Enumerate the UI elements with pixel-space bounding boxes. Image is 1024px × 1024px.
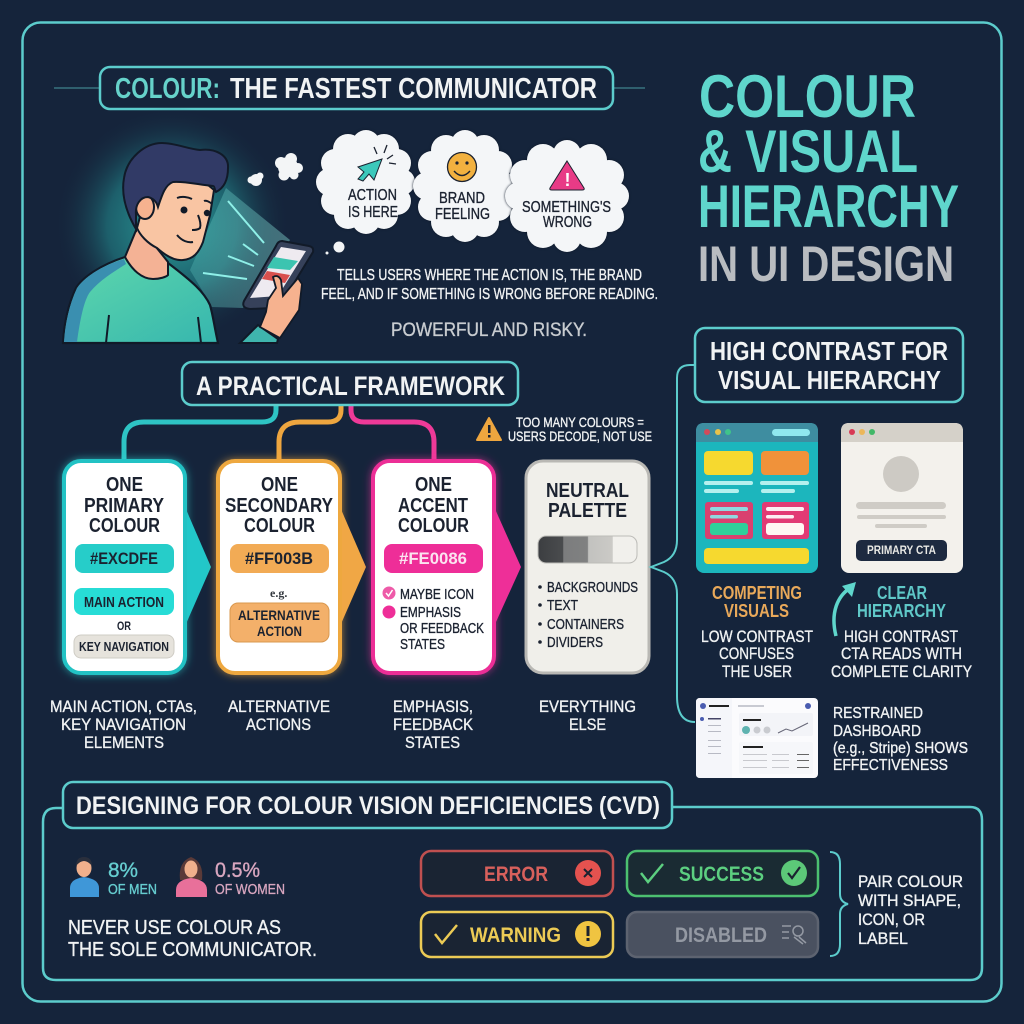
button: warning: WARNING	[470, 924, 561, 947]
intro text: POWERFUL AND RISKY.	[391, 320, 587, 341]
stat: 8% of men: OF MEN	[108, 881, 157, 898]
card heading: COLOUR	[89, 515, 160, 537]
text: low contrast	[701, 627, 813, 681]
stat: 0.5% of women: OF WOMEN	[215, 881, 285, 898]
heading: a practical framework: A PRACTICAL FRAMEWORK	[196, 371, 505, 401]
chip: hex: #EXCDFE	[90, 549, 158, 568]
text: something's wrong: WRONG	[543, 214, 592, 231]
card heading: ONE	[261, 474, 298, 496]
card heading: ONE	[106, 474, 143, 496]
text: brand feeling: FEELING	[435, 206, 490, 223]
label: clear hierarchy: HIERARCHY	[857, 601, 946, 621]
accent list: STATES	[400, 636, 445, 653]
label: competing visuals: COMPETING	[712, 583, 802, 603]
palette list: DIVIDERS	[547, 634, 603, 651]
main title	[698, 63, 959, 292]
intro text	[321, 267, 658, 341]
heading: high contrast	[695, 328, 963, 402]
text: pair colour	[858, 872, 963, 948]
text: pair colour: PAIR COLOUR	[858, 872, 963, 891]
text: something's wrong	[522, 199, 611, 231]
captions under cards: STATES	[405, 733, 460, 752]
text: pair colour: WITH SHAPE,	[858, 891, 961, 910]
ui mockup: clear hierarchy	[841, 423, 963, 573]
card: neutral palette	[526, 461, 649, 673]
connectors from framework heading	[124, 405, 434, 462]
icon: warning triangle: !	[564, 170, 570, 190]
text: too many colours	[508, 414, 652, 444]
card heading	[84, 474, 165, 537]
palette list: BACKGROUNDS	[547, 579, 638, 596]
text: never use colour	[68, 917, 317, 961]
chip: hex	[75, 544, 174, 573]
label: clear hierarchy	[857, 583, 946, 621]
card: accent colour	[373, 461, 521, 673]
panel: cvd	[43, 782, 982, 980]
card heading: PRIMARY	[84, 495, 165, 517]
card heading	[398, 474, 469, 537]
button: error	[421, 851, 613, 896]
label: or: OR	[117, 619, 131, 633]
heading: the fastest communicator: COLOUR:	[115, 73, 220, 105]
stat: 0.5% of women	[215, 859, 285, 898]
label: e.g.: e.g.	[270, 586, 287, 600]
text: restrained dashboard: DASHBOARD	[833, 723, 921, 740]
chip: alternative action: ACTION	[257, 623, 302, 639]
text: restrained dashboard	[833, 705, 968, 774]
bracket connector	[651, 365, 695, 722]
captions under cards: MAIN ACTION, CTAs,	[50, 697, 197, 716]
heading: a practical framework	[182, 362, 518, 405]
text: restrained dashboard: RESTRAINED	[833, 705, 923, 722]
text: too many colours: TOO MANY COLOURS =	[516, 414, 644, 430]
text: action is here	[348, 187, 398, 221]
main title: & VISUAL	[698, 118, 918, 185]
captions under cards: EMPHASIS,	[393, 697, 473, 716]
heading: cvd	[63, 782, 672, 828]
text: action is here: IS HERE	[348, 204, 398, 221]
button: error: ERROR	[484, 863, 548, 886]
accent list	[382, 586, 484, 653]
ui mockup: competing visuals	[696, 423, 818, 573]
card heading	[546, 480, 629, 522]
chip: hex	[230, 544, 329, 573]
button: warning	[421, 912, 613, 957]
warning note	[477, 414, 652, 444]
icon: warning	[477, 418, 501, 440]
button: success: SUCCESS	[679, 863, 764, 886]
captions under cards: ELEMENTS	[84, 733, 164, 752]
text: too many colours: USERS DECODE, NOT USE	[508, 428, 652, 444]
chip: hex	[384, 544, 483, 573]
heading: the fastest communicator: THE FASTEST COMMUNICATOR	[230, 73, 597, 105]
palette list: CONTAINERS	[547, 616, 624, 633]
text: low contrast: CONFUSES	[719, 644, 794, 663]
button: primary cta: PRIMARY CTA	[867, 543, 936, 557]
card heading: COLOUR	[398, 515, 469, 537]
card heading: ONE	[415, 474, 452, 496]
illustration: person looking at phone	[50, 105, 313, 344]
icon: smiley	[448, 152, 476, 182]
card heading: NEUTRAL	[546, 480, 629, 502]
label: competing visuals: VISUALS	[724, 601, 789, 621]
chip: main action	[74, 588, 174, 615]
card heading: SECONDARY	[225, 495, 334, 517]
card: secondary colour	[218, 461, 366, 673]
captions under cards: ELSE	[569, 715, 606, 734]
thought bubbles small	[248, 153, 344, 254]
main title: COLOUR	[699, 63, 916, 130]
button: disabled	[627, 912, 818, 957]
chip: key navigation: KEY NAVIGATION	[79, 639, 169, 654]
main title: IN UI DESIGN	[698, 236, 954, 292]
ui mockup: restrained dashboard	[696, 698, 818, 778]
intro text: TELLS USERS WHERE THE ACTION IS, THE BRAND	[337, 267, 642, 284]
palette swatch	[538, 536, 637, 563]
chip: alternative action: ALTERNATIVE	[238, 607, 320, 623]
button: success	[627, 851, 818, 896]
card heading: PALETTE	[548, 500, 627, 522]
captions under cards	[50, 697, 636, 752]
stat: 8% of men: 8%	[108, 859, 138, 882]
captions under cards: FEEDBACK	[393, 715, 474, 734]
button: primary cta	[856, 540, 947, 561]
chip: hex: #FF003B	[245, 549, 313, 568]
card heading: COLOUR	[244, 515, 315, 537]
card: primary colour	[64, 461, 211, 673]
card heading	[225, 474, 334, 537]
text: never use colour: THE SOLE COMMUNICATOR.	[68, 939, 317, 961]
text: high contrast cta: CTA READS WITH	[841, 644, 962, 663]
text: brand feeling: BRAND	[439, 190, 485, 207]
stat: 8% of men	[108, 859, 157, 898]
card heading: ACCENT	[398, 495, 468, 517]
chip: hex: #FE0086	[399, 549, 467, 568]
captions under cards: ALTERNATIVE	[228, 697, 330, 716]
text: something's wrong: SOMETHING'S	[522, 199, 611, 216]
cloud: action is here	[316, 130, 415, 234]
palette list	[538, 579, 638, 651]
chip: key navigation	[74, 635, 174, 658]
intro text: FEEL, AND IF SOMETHING IS WRONG BEFORE READING.	[321, 286, 658, 303]
text: high contrast cta	[831, 627, 972, 681]
accent list: MAYBE ICON	[400, 586, 474, 603]
text: high contrast cta: HIGH CONTRAST	[844, 627, 958, 646]
icon: man	[70, 857, 99, 897]
text: action is here: ACTION	[348, 187, 397, 204]
cloud: something's wrong	[505, 140, 629, 252]
label: clear hierarchy: CLEAR	[877, 583, 927, 603]
text: pair colour: LABEL	[858, 929, 908, 948]
captions under cards: KEY NAVIGATION	[61, 715, 186, 734]
label: competing visuals	[712, 583, 802, 621]
cloud: brand feeling	[413, 130, 517, 242]
accent list: EMPHASIS	[400, 604, 461, 621]
text: low contrast: LOW CONTRAST	[701, 627, 813, 646]
heading: cvd: DESIGNING FOR COLOUR VISION DEFICIENCIES (CVD)	[76, 792, 660, 820]
icon: curved arrow	[834, 582, 856, 636]
stat: 0.5% of women: 0.5%	[215, 859, 260, 882]
palette list: TEXT	[547, 597, 578, 614]
text: never use colour: NEVER USE COLOUR AS	[68, 917, 281, 939]
icon: woman	[176, 857, 207, 897]
captions under cards: EVERYTHING	[539, 697, 636, 716]
brace	[830, 852, 848, 956]
button: disabled: DISABLED	[675, 924, 767, 947]
chip: alternative action	[230, 603, 329, 642]
text: pair colour: ICON, OR	[858, 910, 925, 929]
icon: cursor	[358, 145, 396, 181]
heading: the fastest communicator	[54, 67, 645, 109]
text: restrained dashboard: EFFECTIVENESS	[833, 757, 948, 774]
text: low contrast: THE USER	[722, 662, 792, 681]
accent list: OR FEEDBACK	[400, 620, 484, 637]
text: restrained dashboard: (e.g., Stripe) SHOWS	[833, 740, 968, 757]
heading: high contrast: HIGH CONTRAST FOR	[710, 336, 948, 366]
text: brand feeling	[435, 190, 490, 223]
heading: high contrast: VISUAL HIERARCHY	[718, 365, 941, 395]
chip: main action: MAIN ACTION	[84, 594, 164, 611]
text: high contrast cta: COMPLETE CLARITY	[831, 662, 972, 681]
captions under cards: ACTIONS	[246, 715, 311, 734]
